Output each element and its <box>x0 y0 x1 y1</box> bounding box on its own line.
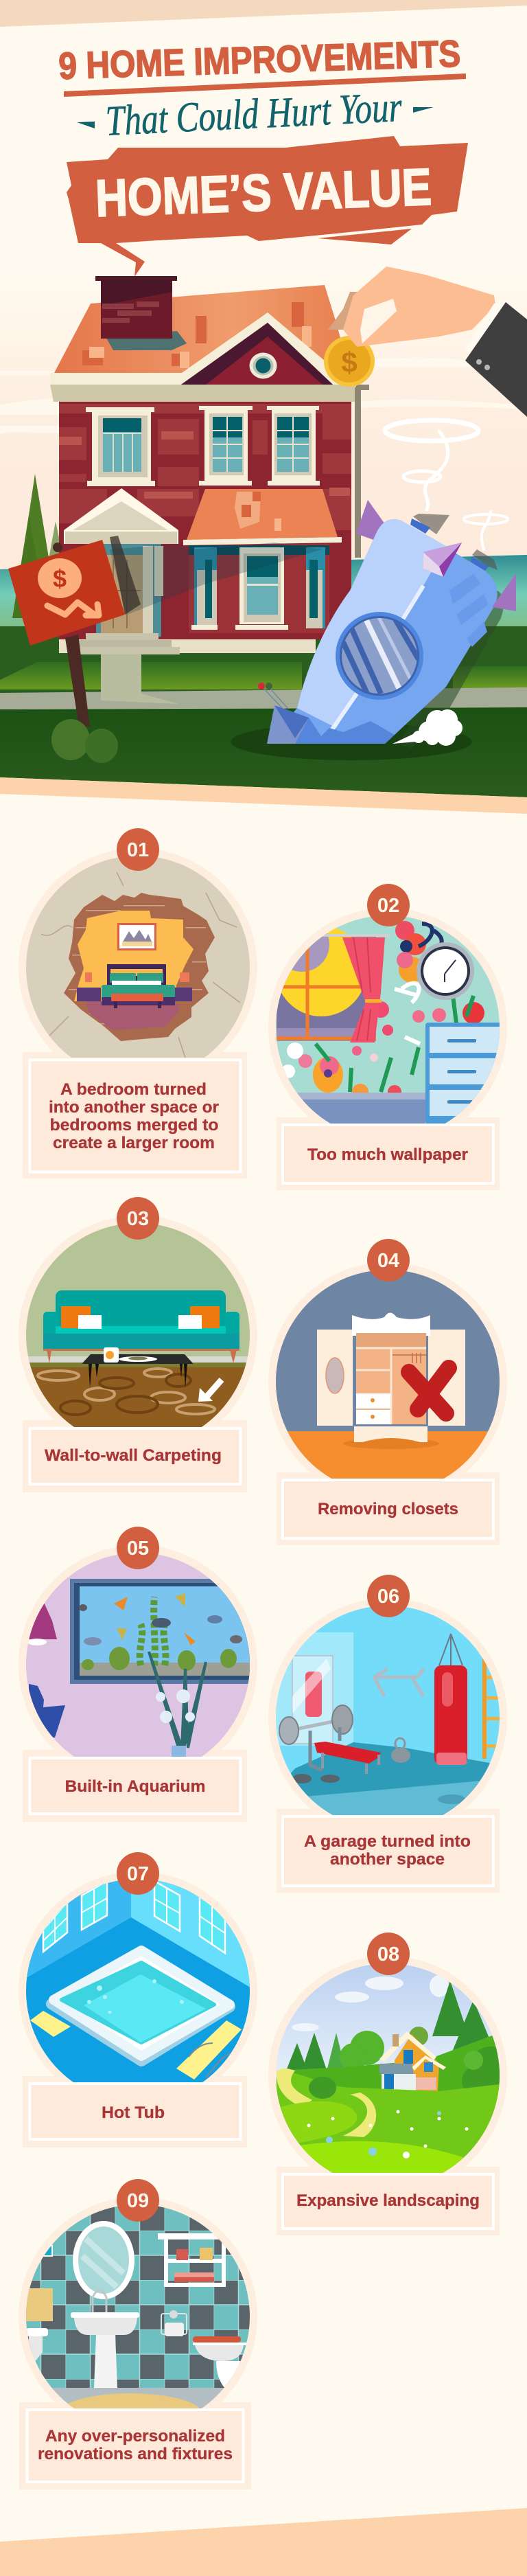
bottom peach band <box>0 2508 527 2576</box>
sign falling arrow <box>47 602 99 615</box>
sign shadow <box>110 536 141 615</box>
heading: home's value: HOME’S VALUE <box>95 158 432 228</box>
caption text: renovations and fixtures <box>38 2445 233 2463</box>
ring <box>268 908 507 1147</box>
top peach band <box>0 0 527 27</box>
caption outer <box>23 2076 247 2147</box>
coin: $ <box>341 346 358 378</box>
nose cone <box>267 705 309 744</box>
round attic window <box>250 353 277 379</box>
gable fill <box>181 323 333 385</box>
caption outer <box>277 2167 500 2235</box>
panel: item 06 garage gym <box>268 1575 507 1893</box>
bushes <box>51 719 118 763</box>
caption text: another space <box>330 1850 445 1869</box>
post top <box>53 543 62 552</box>
bay window awning <box>183 489 342 545</box>
caption box <box>30 1758 240 1814</box>
scene: broken wall bedroom <box>21 852 254 1058</box>
bay window centre <box>235 547 288 630</box>
eave <box>50 373 180 385</box>
sign board <box>8 540 125 646</box>
caption text: create a larger room <box>53 1134 215 1152</box>
caption text: A garage turned into <box>304 1832 471 1851</box>
caption box <box>30 2084 240 2139</box>
caption text <box>49 1080 219 1152</box>
hand highlight <box>360 299 397 343</box>
gable outline <box>173 312 343 385</box>
hand <box>343 266 495 347</box>
caption box <box>30 1428 240 1484</box>
caption text: Any over-personalized <box>45 2427 225 2446</box>
window right <box>267 406 320 486</box>
caption box <box>30 1060 240 1172</box>
number badge <box>117 1527 159 1569</box>
caption text: bedrooms merged to <box>49 1116 218 1135</box>
sign coin <box>38 558 82 598</box>
lawn front <box>0 707 527 797</box>
sign dollar: $ <box>53 565 67 593</box>
number badge: 01 <box>127 839 149 861</box>
dust cloud <box>393 709 462 746</box>
hand with coin <box>324 266 527 417</box>
path <box>0 687 527 709</box>
walkway <box>101 654 178 704</box>
scene: aquarium <box>21 1545 254 1758</box>
number badge <box>117 828 159 871</box>
caption outer <box>277 1117 500 1190</box>
diamond fin <box>423 543 462 577</box>
number badge: 08 <box>377 1944 399 1965</box>
scene: hot tub <box>26 1880 250 2082</box>
number badge: 02 <box>377 895 399 917</box>
right fin <box>492 573 516 611</box>
window centre <box>199 406 253 486</box>
house <box>50 276 369 654</box>
caption outer <box>277 1809 500 1893</box>
caption outer <box>23 1750 247 1822</box>
number badge <box>117 2179 159 2222</box>
caption box <box>283 2174 493 2229</box>
ring <box>268 1956 507 2195</box>
panel: item 07 hot tub <box>19 1852 257 2147</box>
caption outer <box>23 1052 247 1178</box>
bay window wall <box>189 544 329 633</box>
for-sale sign <box>8 536 141 727</box>
left teal arrow <box>77 122 95 128</box>
lawn right stripe <box>453 666 527 688</box>
caption outer <box>23 1420 247 1492</box>
heading: that could hurt your: That Could Hurt Your <box>104 84 403 145</box>
caption text: into another space or <box>49 1098 219 1117</box>
number badge <box>367 1575 410 1617</box>
finger shadow <box>328 292 364 330</box>
scene: wardrobe removal <box>274 1264 504 1479</box>
heading: 9 home improvements: 9 HOME IMPROVEMENTS <box>58 32 461 87</box>
shadow of sign over house <box>110 543 323 615</box>
caption text: Wall-to-wall Carpeting <box>45 1446 222 1465</box>
number badge <box>367 884 410 926</box>
scene: home gym <box>274 1600 504 1820</box>
sky <box>0 275 527 570</box>
number badge <box>367 1933 410 1975</box>
caption outer <box>19 2402 251 2489</box>
gable shadow <box>181 323 333 385</box>
sleeve buttons <box>476 359 490 370</box>
steps <box>75 633 180 654</box>
ring <box>19 1871 257 2110</box>
clouds <box>0 358 527 434</box>
caption text: Removing closets <box>318 1500 458 1518</box>
brick lighter bands <box>59 404 351 530</box>
number badge: 09 <box>127 2190 149 2212</box>
ring <box>268 1262 507 1501</box>
panel: item 05 aquarium <box>19 1527 257 1822</box>
panel: item 09 bathroom <box>19 2179 257 2489</box>
caption outer <box>277 1472 500 1545</box>
brick wall <box>59 402 351 639</box>
panel: item 02 wallpaper <box>268 884 507 1190</box>
scene: landscaped yard <box>276 1965 500 2173</box>
scene: wallpaper room <box>274 913 504 1127</box>
panel: item 04 closets <box>268 1239 507 1545</box>
caption text <box>304 1832 471 1869</box>
rocket tail flare <box>267 707 395 744</box>
number badge: 05 <box>127 1538 149 1560</box>
ring <box>19 2197 257 2436</box>
caption text: Hot Tub <box>102 2104 165 2122</box>
ring <box>19 848 257 1087</box>
number badge: 04 <box>377 1250 399 1272</box>
number badge: 06 <box>377 1586 399 1608</box>
caption text: A bedroom turned <box>60 1080 207 1099</box>
rocket vents <box>449 573 489 647</box>
ring <box>19 1545 257 1784</box>
sign post <box>65 635 90 727</box>
rocket <box>258 500 516 749</box>
roof light patches <box>89 326 312 368</box>
bay window shadow band <box>189 545 329 555</box>
coin <box>324 336 375 387</box>
right teal arrow <box>413 107 434 113</box>
number badge <box>117 1852 159 1895</box>
chimney <box>95 276 177 339</box>
illustration: hero scene <box>0 266 527 814</box>
sleeve <box>465 302 527 417</box>
caption text: Expansive landscaping <box>296 2191 480 2210</box>
rocket body <box>267 519 497 744</box>
portico pediment <box>64 488 178 544</box>
portico door <box>96 544 163 637</box>
trees behind house <box>12 474 66 618</box>
caption box <box>27 2410 243 2482</box>
panel: item 01 bedroom <box>19 828 257 1178</box>
caption box <box>283 1480 493 1538</box>
caption text <box>38 2427 233 2463</box>
smoke <box>385 420 508 549</box>
nose cone dark <box>274 705 309 738</box>
cuff <box>464 304 504 357</box>
strip under hero <box>0 777 527 814</box>
window left <box>86 407 155 486</box>
panel: item 08 landscaping <box>268 1933 511 2235</box>
title banner shape <box>67 136 468 277</box>
number badge: 03 <box>127 1208 149 1230</box>
ring <box>268 1598 507 1837</box>
ring <box>19 1216 257 1455</box>
rocket light face <box>297 519 446 728</box>
scene: living room carpet <box>21 1216 254 1429</box>
sea horizon <box>0 555 527 628</box>
chimney flashing <box>104 331 187 350</box>
number badge: 07 <box>127 1863 149 1885</box>
crash shadow <box>231 723 472 760</box>
lawn mid stripe <box>0 662 302 689</box>
back fin <box>356 500 386 540</box>
banner shard <box>318 229 412 244</box>
antenna <box>258 683 288 709</box>
rocket stripe <box>331 586 423 731</box>
heading underline <box>64 73 466 97</box>
caption text: Built-in Aquarium <box>65 1777 206 1796</box>
rocket shadow <box>398 591 504 749</box>
lawn back <box>0 626 527 695</box>
cornice <box>50 385 355 402</box>
caption box <box>283 1816 493 1886</box>
caption box <box>283 1125 493 1183</box>
panel: item 03 carpeting <box>19 1197 257 1492</box>
caption text: Too much wallpaper <box>307 1145 468 1164</box>
bay window right <box>306 547 325 628</box>
number badge <box>117 1197 159 1240</box>
bricks highlight <box>59 431 350 499</box>
scene: bathroom tiles <box>26 2206 250 2408</box>
main roof <box>54 285 350 373</box>
bay window left <box>191 547 218 630</box>
foundation <box>59 639 316 653</box>
number badge <box>367 1239 410 1281</box>
porthole <box>336 612 423 700</box>
connectors <box>410 514 497 571</box>
roof patches <box>82 302 304 366</box>
drainpipe <box>355 385 369 558</box>
